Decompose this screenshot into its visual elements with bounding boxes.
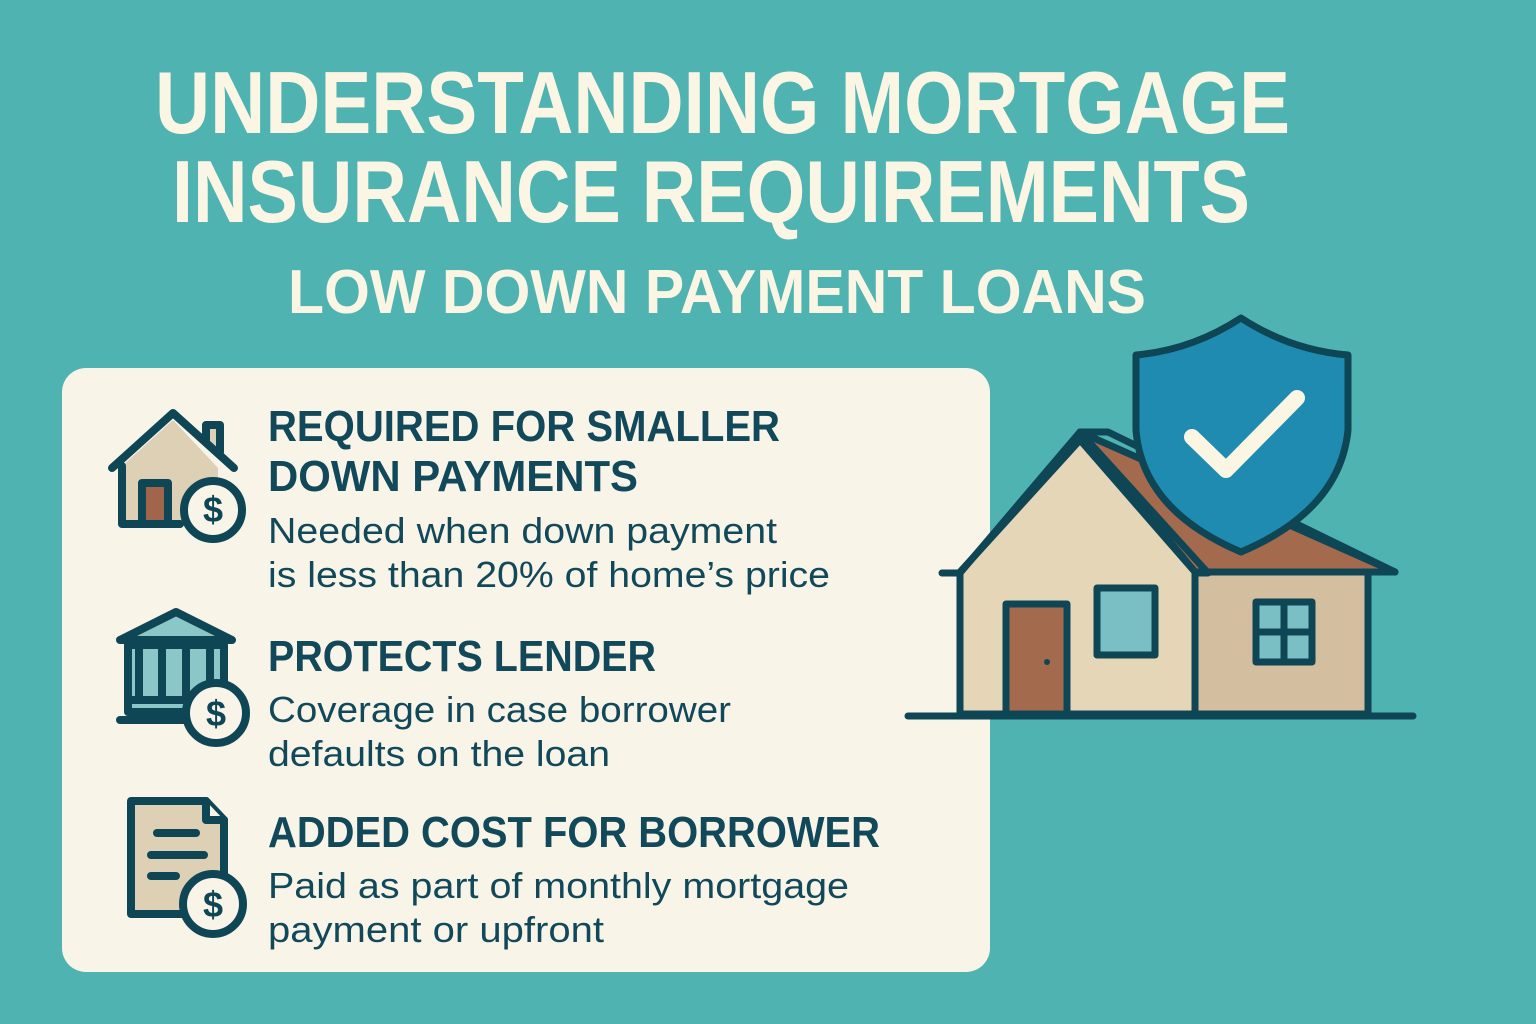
icon: shield check xyxy=(1136,318,1348,552)
heading: added cost: ADDED COST FOR BORROWER xyxy=(268,808,880,857)
text: added cost body: payment or upfront xyxy=(268,909,604,950)
text: added cost body xyxy=(268,865,849,950)
icon: document with dollar xyxy=(131,801,243,934)
subtitle: LOW DOWN PAYMENT LOANS xyxy=(288,258,1146,327)
icon: house with dollar xyxy=(112,413,242,539)
text: protects body xyxy=(268,689,731,774)
text: protects body: Coverage in case borrower xyxy=(268,689,731,730)
text: required body: is less than 20% of home’s price xyxy=(268,554,830,595)
icon: document with dollar: $ xyxy=(203,884,223,925)
title: UNDERSTANDING MORTGAGE xyxy=(155,53,1290,152)
title: INSURANCE REQUIREMENTS xyxy=(172,142,1250,241)
text: added cost body: Paid as part of monthly mortgage xyxy=(268,865,849,906)
heading: required xyxy=(268,402,780,501)
text: required body xyxy=(268,510,830,595)
icon: bank with dollar xyxy=(120,612,246,743)
text: protects body: defaults on the loan xyxy=(268,733,610,774)
text: required body: Needed when down payment xyxy=(268,510,777,551)
heading: protects lender: PROTECTS LENDER xyxy=(268,632,656,681)
icon: house with dollar: $ xyxy=(203,489,223,530)
title xyxy=(155,53,1290,241)
heading: required: DOWN PAYMENTS xyxy=(268,452,638,501)
icon: bank with dollar: $ xyxy=(206,693,226,734)
heading: required: REQUIRED FOR SMALLER xyxy=(268,402,780,451)
illustration: house with shield xyxy=(908,318,1413,716)
panel: requirements xyxy=(62,368,990,972)
